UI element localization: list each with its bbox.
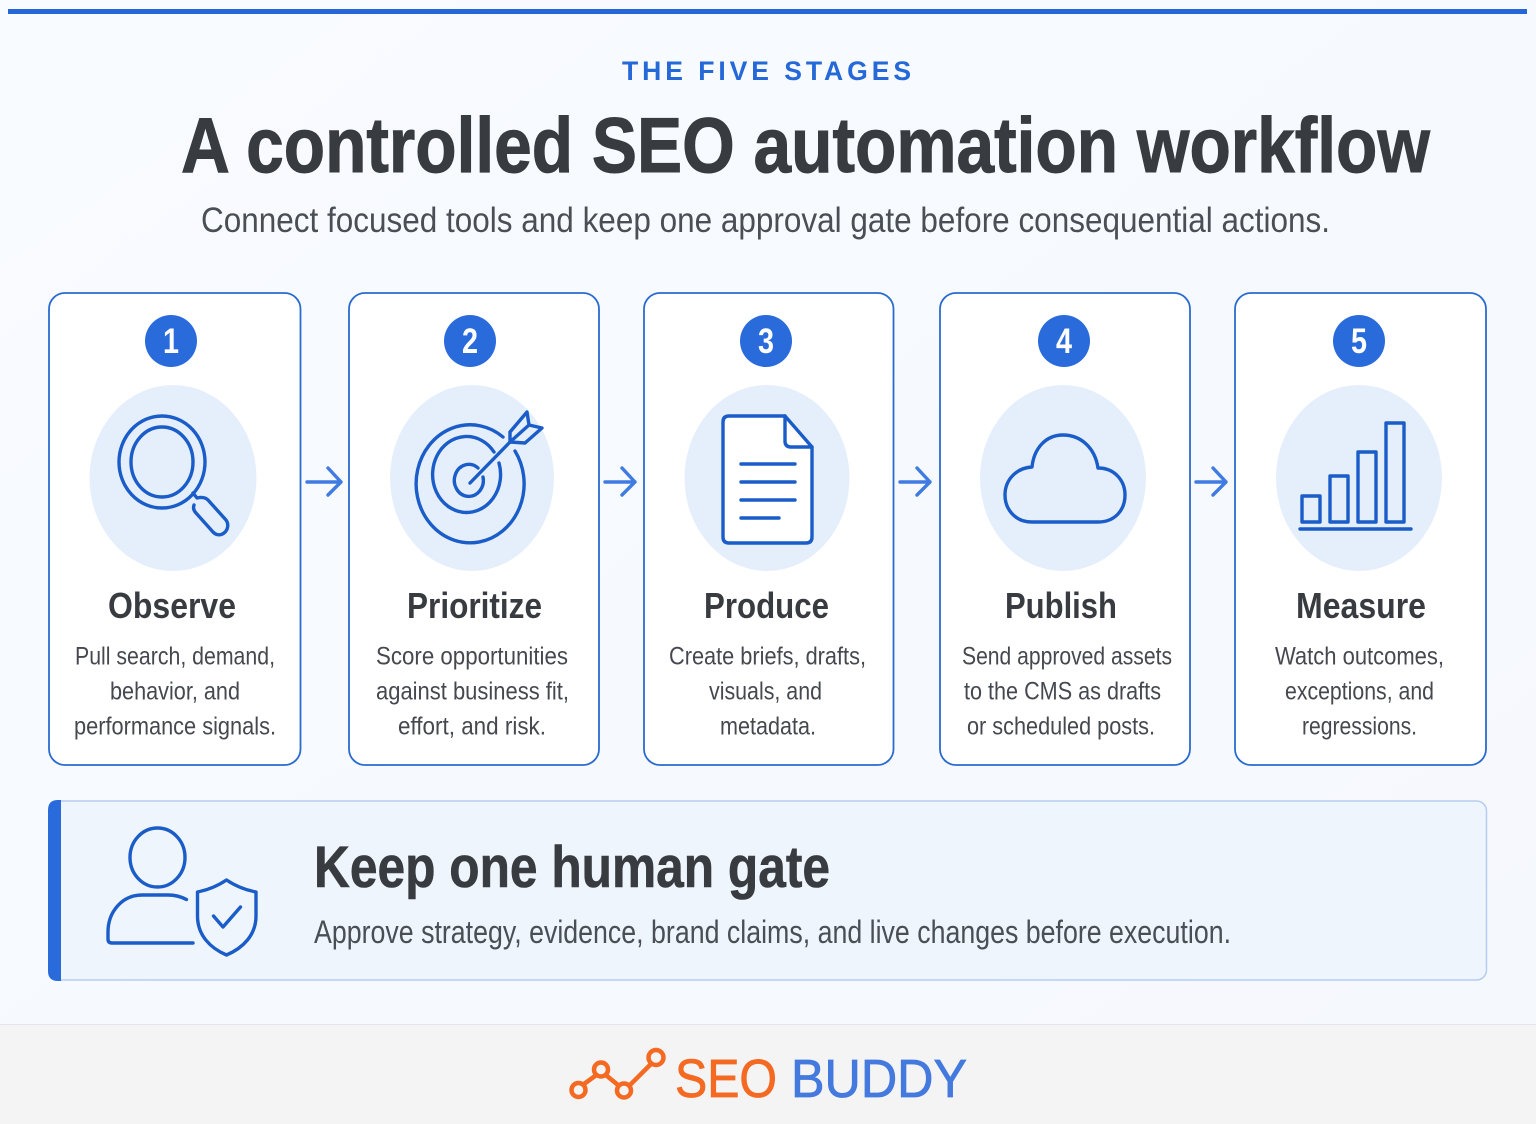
footer band [0,1024,1536,1124]
icon: cloud [980,385,1146,571]
badge: number 5 [1333,315,1385,367]
description: produce [669,642,866,740]
subtitle: Connect focused tools and keep one approval gate before consequential actions. [201,201,1330,240]
heading: measure: Measure [1296,585,1426,626]
panel: stage 3 produce [644,293,894,765]
panel: stage 1 observe [49,293,300,765]
panel: stage 4 publish [940,293,1190,765]
badge: number 2 [444,315,496,367]
badge: number 4: 4 [1056,322,1072,361]
panel: stage 5 measure [1235,293,1486,765]
description: produce: Create briefs, drafts, [669,642,866,670]
icon: magnifying glass [90,385,256,571]
badge: number 2: 2 [462,322,478,361]
top accent bar [8,9,1527,14]
description: publish: Send approved assets [962,642,1172,670]
description: measure: Watch outcomes, [1275,642,1444,670]
badge: number 3: 3 [758,322,774,361]
arrow: prioritize to produce [605,468,635,495]
heading: observe: Observe [108,585,236,626]
icon: document [684,385,850,571]
description: observe: Pull search, demand, [75,642,275,670]
icon: bar chart [1276,385,1442,571]
panel: stage 2 prioritize [349,293,599,765]
description: produce: metadata. [720,712,816,740]
icon: target with arrow [390,385,554,571]
badge: number 5: 5 [1351,322,1367,361]
arrow: publish to measure [1196,468,1226,495]
heading: publish: Publish [1005,585,1117,626]
arrow: observe to prioritize [307,468,341,495]
description: publish: to the CMS as drafts [964,678,1161,706]
description: measure: exceptions, and [1285,678,1434,706]
badge: number 3 [740,315,792,367]
arrow: produce to publish [900,468,930,495]
description: prioritize [376,642,569,740]
heading: produce: Produce [704,585,829,626]
description: observe: performance signals. [74,712,276,740]
wordmark: BUDDY [791,1049,967,1109]
description: measure [1275,642,1444,740]
description: human gate: Approve strategy, evidence, brand claims, and live changes before execution. [314,914,1231,950]
badge: number 1: 1 [163,322,179,361]
description: measure: regressions. [1302,712,1417,740]
description: produce: visuals, and [709,678,822,706]
logo: seo buddy [572,1049,967,1109]
description: publish [962,642,1172,740]
description: prioritize: effort, and risk. [398,712,546,740]
heading: prioritize: Prioritize [407,585,542,626]
description: prioritize: Score opportunities [376,642,568,670]
badge: number 1 [145,315,197,367]
description: publish: or scheduled posts. [967,712,1155,740]
description: observe: behavior, and [110,678,240,706]
description: prioritize: against business fit, [376,678,569,706]
wordmark [675,1049,967,1109]
icon: person with shield [108,828,256,955]
wordmark: SEO [675,1049,777,1109]
description: observe [74,642,276,740]
panel: human gate callout [48,800,1486,981]
heading: keep one human gate: Keep one human gate [314,835,830,900]
eyebrow: the five stages: THE FIVE STAGES [622,56,915,86]
icon: orange line chart [572,1050,664,1098]
badge: number 4 [1038,315,1090,367]
